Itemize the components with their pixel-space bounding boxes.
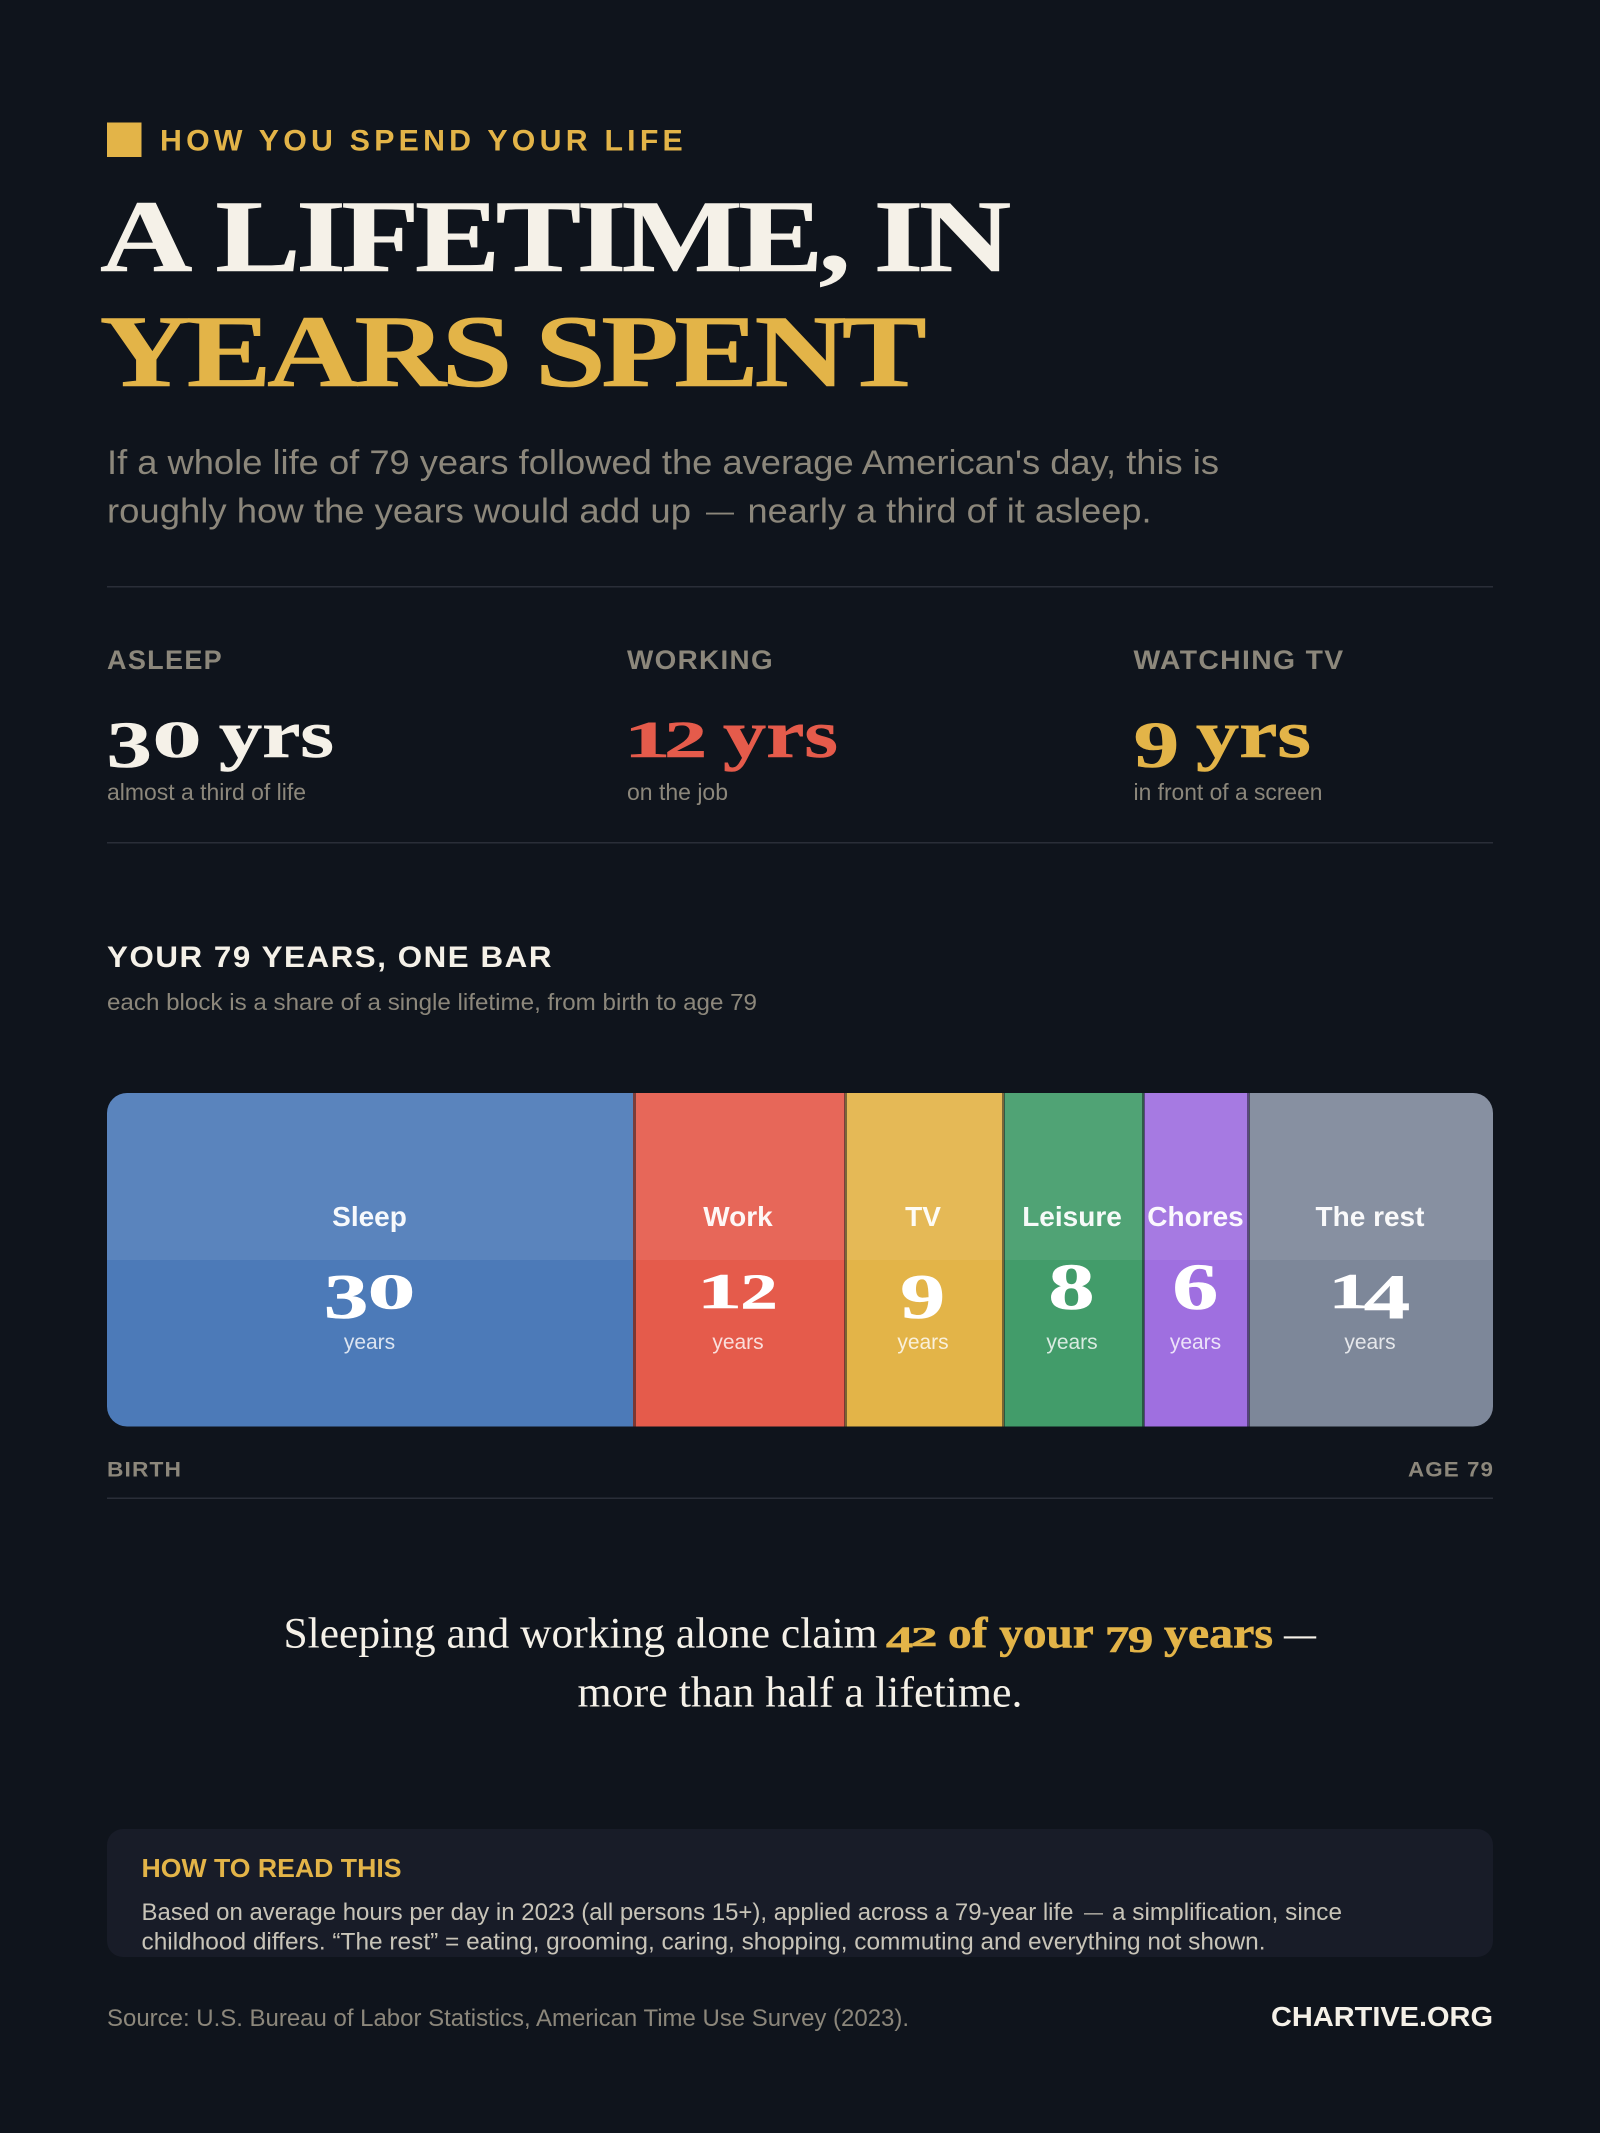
callout body: Based on average hours per day in 2023 (all persons 15+), applied across a 79-year life: [142, 1899, 1074, 1926]
callout quote: [284, 1609, 1317, 1716]
callout quote: of your: [948, 1609, 1094, 1657]
section heading: [107, 941, 757, 1015]
header: [100, 122, 1219, 530]
segment: chores: years: [1170, 1331, 1221, 1354]
segment: tv: [897, 1201, 949, 1354]
section heading: YOUR 79 YEARS, ONE BAR: [107, 941, 553, 974]
segment: work: [697, 1201, 778, 1354]
segment: sleep: 0: [368, 1264, 415, 1319]
segment: chores: Chores: [1147, 1201, 1244, 1232]
callout quote: years: [1164, 1609, 1273, 1657]
stat: working: on the job: [627, 779, 728, 805]
stat: asleep: yrs: [219, 697, 334, 772]
segment: the rest: 1: [1329, 1265, 1369, 1319]
callout quote: 4: [886, 1620, 913, 1661]
segment: tv: 9: [900, 1261, 945, 1332]
icon: eyebrow square: [107, 122, 142, 157]
stat: asleep: almost a third of life: [107, 779, 306, 805]
stat: watching tv: yrs: [1196, 697, 1311, 772]
stat: watching tv: [1134, 645, 1344, 805]
callout body: a simplification, since: [1112, 1899, 1342, 1926]
segment: work: 1: [697, 1263, 742, 1319]
section heading: each block is a share of a single lifetime, from birth to age 79: [107, 989, 757, 1015]
callout quote: 7: [1105, 1620, 1129, 1661]
bar segments: [107, 1093, 1493, 1427]
callout quote: 9: [1128, 1619, 1153, 1660]
segment: the rest: [1316, 1201, 1424, 1354]
segment: leisure: years: [1046, 1331, 1098, 1354]
segment: sleep: 3: [324, 1261, 368, 1332]
subtitle: nearly a third of it asleep.: [748, 492, 1152, 530]
title: [100, 180, 1010, 409]
panel: how to read this: [107, 1829, 1493, 1957]
subtitle: roughly how the years would add up: [107, 492, 691, 530]
subtitle: —: [706, 496, 734, 526]
callout body: childhood differs. “The rest” = eating, grooming, caring, shopping, commuting and everything not shown.: [142, 1928, 1266, 1956]
callout quote: more than half a lifetime.: [578, 1670, 1022, 1716]
segment: leisure: Leisure: [1022, 1201, 1122, 1232]
segment: work: Work: [703, 1201, 773, 1232]
segment: work: 2: [740, 1263, 778, 1319]
segment: the rest: The rest: [1316, 1201, 1424, 1232]
segment: work: years: [712, 1331, 764, 1354]
segment: sleep: Sleep: [332, 1201, 407, 1232]
stat: working: 2: [664, 712, 707, 769]
callout body: —: [1084, 1903, 1103, 1924]
segment: leisure: [1022, 1201, 1122, 1354]
axis labels: [107, 1458, 1494, 1482]
stat: asleep: 3: [107, 709, 152, 782]
segment: the rest: 4: [1364, 1262, 1410, 1332]
brand: CHARTIVE.ORG: [1271, 2001, 1493, 2032]
panel: key stats: [107, 645, 1345, 805]
segment: chores: 6: [1172, 1251, 1218, 1324]
axis labels: BIRTH: [107, 1458, 182, 1482]
title: A LIFETIME, IN: [100, 180, 1010, 294]
source: Source: U.S. Bureau of Labor Statistics, American Time Use Survey (2023).: [107, 2005, 909, 2032]
stat: watching tv: WATCHING TV: [1134, 645, 1344, 675]
axis labels: AGE 79: [1408, 1458, 1494, 1482]
stat: working: yrs: [723, 697, 838, 772]
segment: chores: [1147, 1201, 1244, 1354]
callout body: [142, 1898, 1342, 1956]
eyebrow label: HOW YOU SPEND YOUR LIFE: [160, 124, 687, 158]
segment: tv: years: [897, 1331, 949, 1354]
subtitle: [107, 444, 1219, 530]
subtitle: If a whole life of 79 years followed the average American's day, this is: [107, 444, 1219, 482]
segment: the rest: years: [1344, 1331, 1396, 1354]
stat: asleep: [107, 645, 334, 805]
stat: working: 1: [624, 711, 671, 769]
segment: tv: TV: [905, 1201, 941, 1232]
chart: stacked lifetime bar: [107, 1093, 1493, 1427]
callout quote: Sleeping and working alone claim: [284, 1610, 878, 1658]
callout quote: 2: [911, 1623, 937, 1652]
stat: asleep: 0: [153, 711, 201, 768]
segment: leisure: 8: [1048, 1251, 1095, 1324]
callout heading: HOW TO READ THIS: [142, 1853, 402, 1883]
segment: sleep: years: [344, 1331, 395, 1354]
title: YEARS SPENT: [100, 295, 925, 409]
stat: asleep: ASLEEP: [107, 645, 223, 675]
stat: working: WORKING: [627, 645, 774, 675]
segment: sleep: [324, 1201, 415, 1354]
callout quote: —: [1283, 1610, 1317, 1658]
stat: watching tv: 9: [1134, 709, 1179, 782]
stat: working: [624, 645, 838, 805]
stat: watching tv: in front of a screen: [1134, 779, 1322, 805]
footer: [107, 2001, 1493, 2032]
